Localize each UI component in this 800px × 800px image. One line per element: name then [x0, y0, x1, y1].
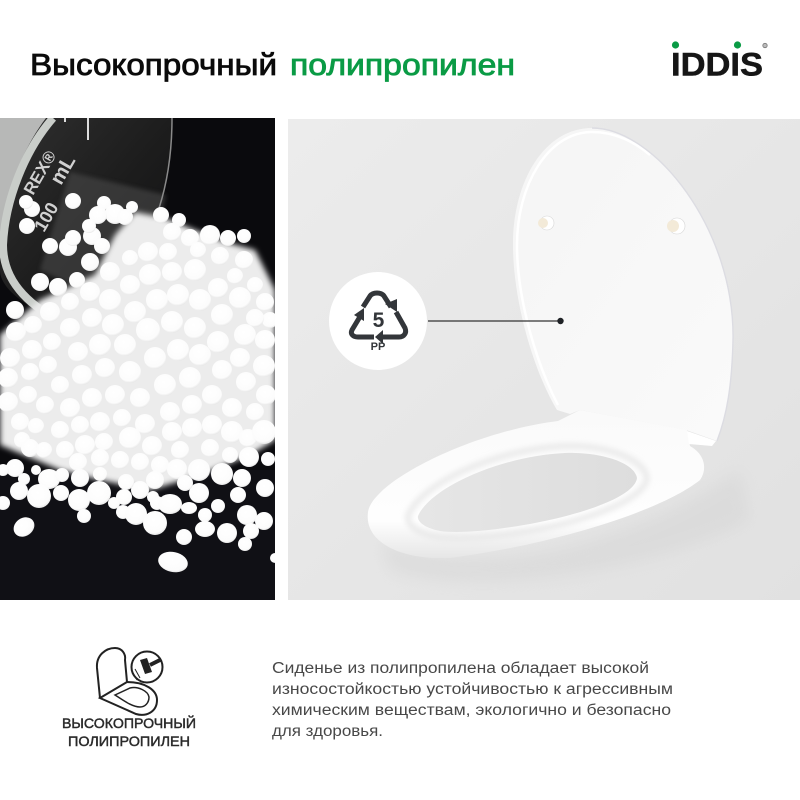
icon label: ПОЛИПРОПИЛЕН: [68, 733, 190, 749]
title: полипропилен: [290, 47, 515, 82]
photo: toilet seat on light background: [288, 119, 800, 600]
icon: seat with hammer strength badge: [97, 648, 162, 715]
lid bumper left: [540, 216, 554, 230]
description text: химическим веществам, экологично и безопасно: [272, 702, 671, 719]
badge: recycling code 5 PP: PP: [371, 341, 385, 353]
callout leader line and dot: [428, 318, 564, 324]
description text: износостойкостью устойчивостью к агрессивным: [272, 681, 673, 698]
photo: polypropylene pellets spilling from a glass beaker: [0, 118, 280, 600]
seat ring: [368, 410, 704, 558]
description text: для здоровья.: [272, 723, 383, 740]
title: Высокопрочный: [30, 47, 277, 82]
glass beaker: REX®: [20, 147, 60, 198]
seat hinge: [687, 431, 716, 446]
description text: Сиденье из полипропилена обладает высокой: [272, 660, 649, 677]
seat lid: [513, 128, 733, 446]
icon label: [62, 714, 196, 749]
title: [30, 47, 515, 82]
glass beaker: [0, 118, 172, 323]
glass beaker: 100: [30, 199, 62, 235]
glass beaker: mL: [46, 152, 80, 188]
pellet mass: [0, 193, 280, 575]
icon label: ВЫСОКОПРОЧНЫЙ: [62, 714, 196, 731]
description text: [272, 660, 673, 740]
badge: recycling code 5 PP: [329, 272, 427, 370]
icon: hammer badge: [132, 652, 162, 682]
recycling arrows: [351, 293, 406, 344]
lid bumper right: [669, 218, 685, 234]
badge: recycling code 5 PP: 5: [373, 309, 385, 332]
logo: IDDIS: IDDIS: [671, 46, 763, 82]
